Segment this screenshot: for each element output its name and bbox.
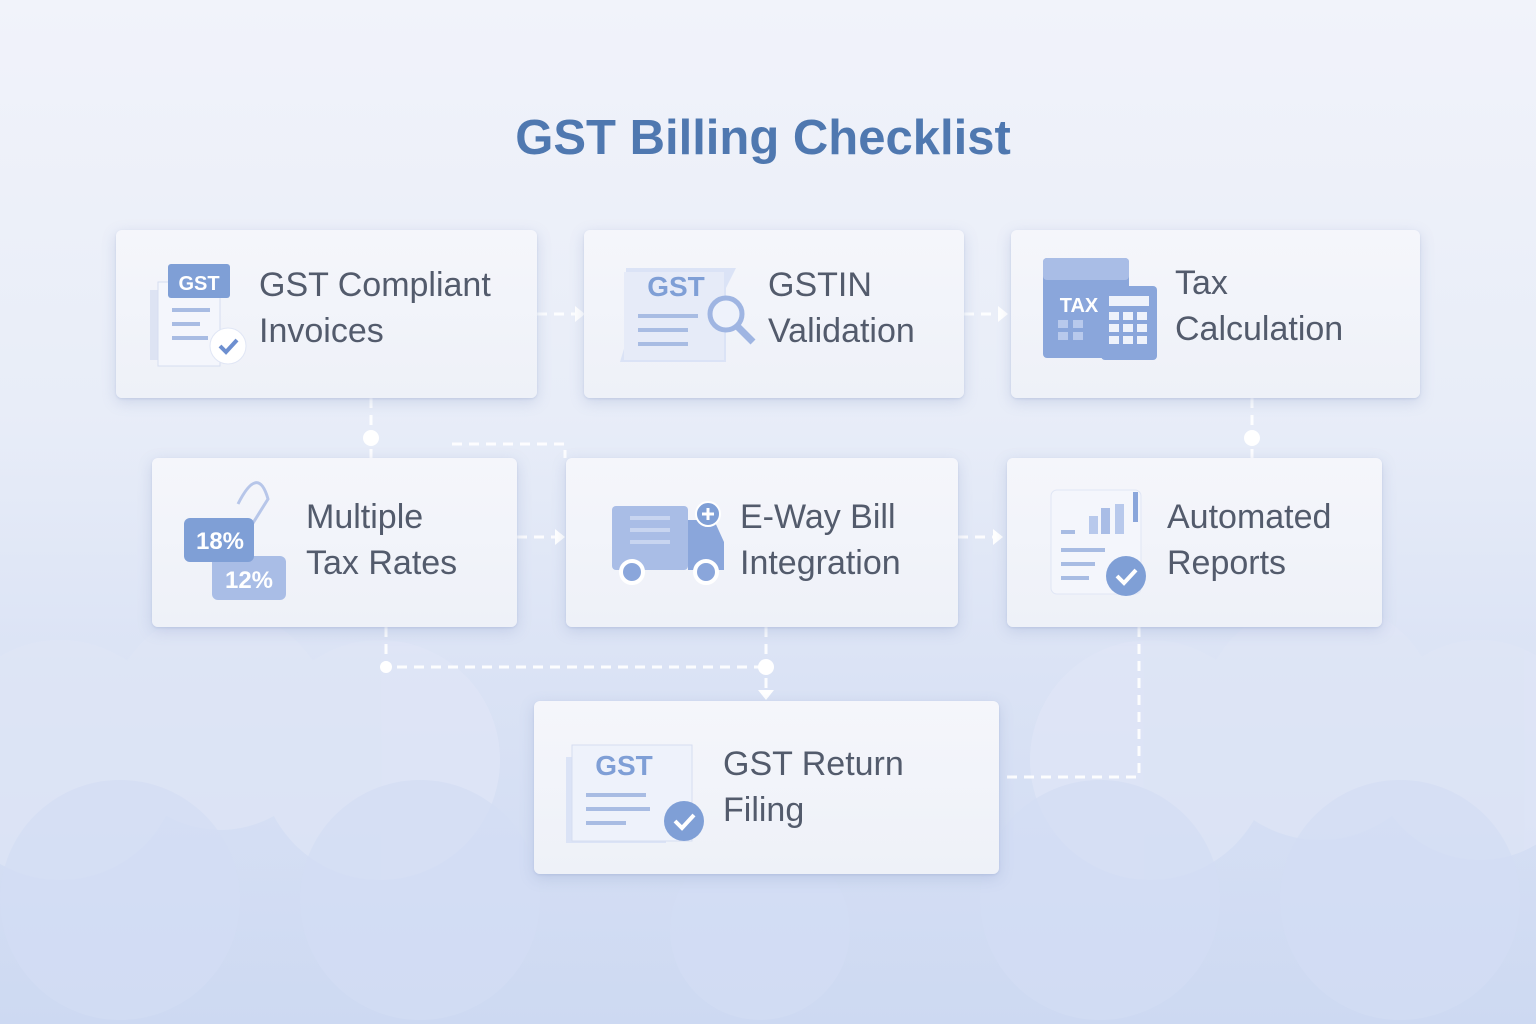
panel: Automated Reports	[1007, 458, 1382, 627]
text	[259, 266, 491, 350]
text: Calculation	[1175, 310, 1343, 348]
icon: tax rate tags: 18%	[196, 528, 244, 555]
icon: GST invoice: GST	[178, 273, 220, 295]
text: GST Return	[723, 745, 904, 783]
text: Tax Rates	[306, 544, 457, 582]
icon: report with check	[1050, 490, 1146, 596]
text	[1167, 498, 1331, 582]
text	[740, 498, 901, 582]
text: Tax	[1175, 264, 1228, 302]
text: GST Compliant	[259, 266, 491, 304]
panel: Tax Calculation	[1011, 230, 1420, 398]
text: E-Way Bill	[740, 498, 896, 536]
icon: tax calculator	[1043, 258, 1157, 360]
text	[723, 745, 904, 829]
icon: GST document with magnifier: GST	[647, 271, 705, 302]
panel: GSTIN Validation	[584, 230, 964, 398]
icon: tax rate tags	[184, 481, 286, 600]
text: GSTIN	[768, 266, 872, 304]
icon: tax rate tags: 12%	[225, 567, 273, 594]
text: Integration	[740, 544, 901, 582]
text: Validation	[768, 312, 915, 350]
text	[306, 498, 457, 582]
panel: GST Compliant Invoices	[116, 230, 537, 398]
text	[1175, 264, 1343, 348]
panel: E-Way Bill Integration	[566, 458, 958, 627]
text: Reports	[1167, 544, 1286, 582]
icon: truck	[612, 501, 724, 585]
icon: GST return document: GST	[595, 750, 653, 781]
icon: GST invoice	[150, 264, 246, 366]
text: Invoices	[259, 312, 384, 350]
panel: GST Return Filing	[534, 701, 999, 874]
text	[768, 266, 915, 350]
text: Automated	[1167, 498, 1331, 536]
text: Multiple	[306, 498, 423, 536]
title: GST Billing Checklist	[515, 111, 1011, 165]
text: Filing	[723, 791, 804, 829]
icon: GST document with magnifier	[620, 268, 756, 362]
panel: Multiple Tax Rates	[152, 458, 517, 627]
icon: GST return document	[566, 744, 704, 843]
icon: tax calculator: TAX	[1060, 295, 1099, 317]
